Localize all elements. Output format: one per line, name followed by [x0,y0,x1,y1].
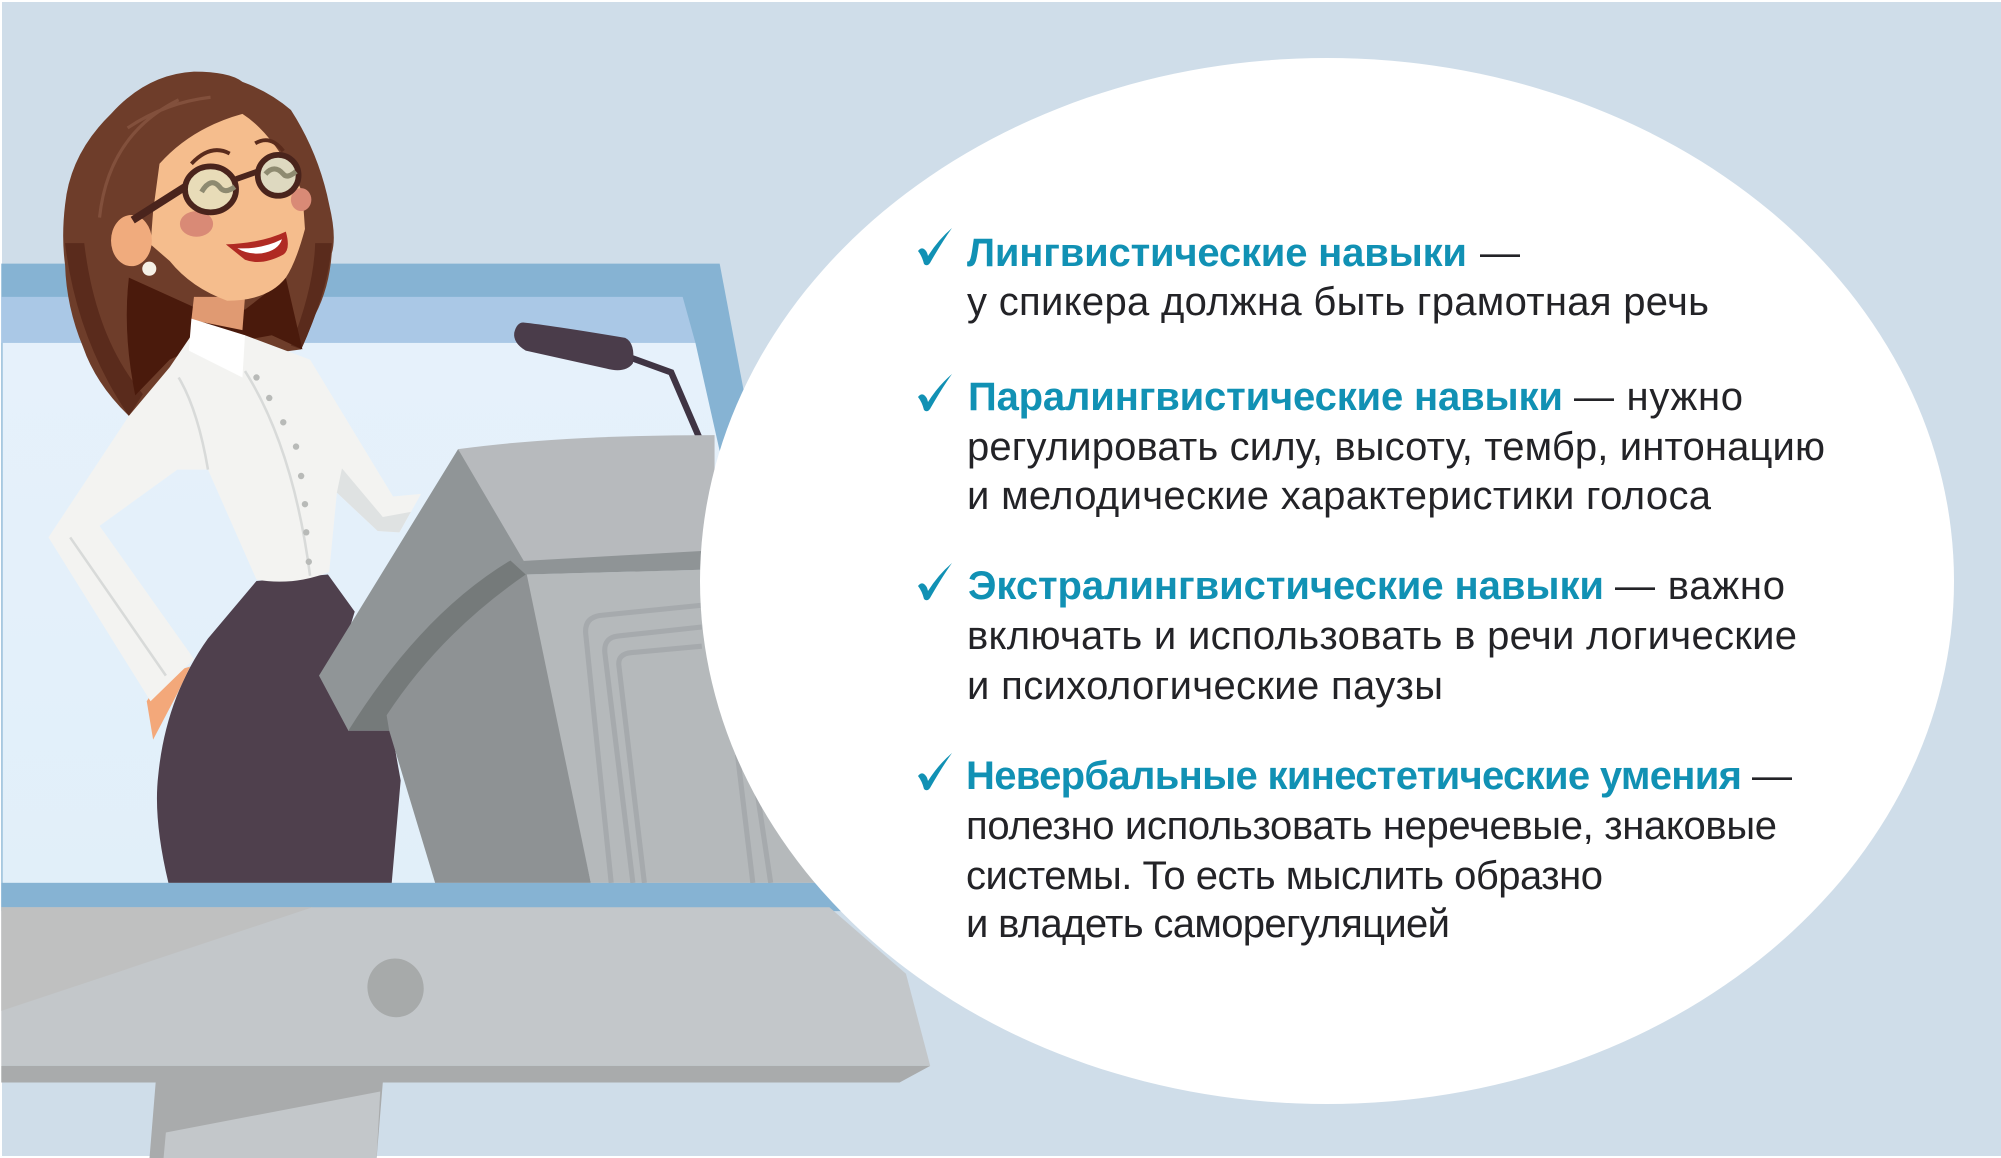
face [151,114,305,301]
text 1: у спикера должна быть грамотная речь [967,280,1709,324]
check mark 4 [918,753,952,790]
text 2: и мелодические характеристики голоса [967,474,1712,518]
podium [319,435,829,883]
microphone [514,322,699,438]
mouth [226,232,288,262]
blouse buttons [253,374,312,565]
text 2: Паралингвистические навыки [968,375,1563,419]
ear [111,215,152,266]
check mark 2 [918,374,952,411]
text 4: и владеть саморегуляцией [966,902,1450,946]
text 3: — важно [1615,564,1785,608]
item 1: linguistic skills [918,228,1709,324]
check mark 3 [918,563,952,600]
text 4: Невербальные кинестетические умения [966,754,1742,798]
text 3: и психологические паузы [967,664,1443,708]
text 4 [966,754,1792,946]
check mark 1 [918,228,952,265]
blouse [48,335,421,701]
text 1: Лингвистические навыки [967,231,1467,275]
desk [1,883,930,1158]
woman [48,72,421,883]
text 3: включать и использовать в речи логические [967,614,1797,658]
text 4: — [1752,754,1792,798]
text 2: — нужно [1574,375,1743,419]
hand [147,667,190,740]
earring [142,262,156,276]
monitor frame [1,264,842,911]
speech bubble [700,58,1954,1104]
text 1 [967,231,1709,324]
neck [191,297,245,330]
text 3: Экстралингвистические навыки [968,564,1604,608]
item 2: paralinguistic skills [918,374,1825,518]
item 3: extralinguistic skills [918,563,1797,708]
item 4: nonverbal kinesthetic skills [918,753,1792,946]
text 4: полезно использовать неречевые, знаковые [966,804,1777,848]
skirt [157,575,401,883]
glasses [133,155,299,220]
text 1: — [1480,231,1520,275]
text 4: системы. То есть мыслить образно [966,854,1603,898]
cheeks [180,211,213,237]
text 3 [967,564,1797,708]
text 2: регулировать силу, высоту, тембр, интонацию [967,425,1825,469]
eyebrows [191,140,283,164]
text 2 [967,375,1825,518]
dark hair behind neck [127,278,302,395]
hair [63,72,334,416]
illustration: speaker at podium [1,72,930,1158]
